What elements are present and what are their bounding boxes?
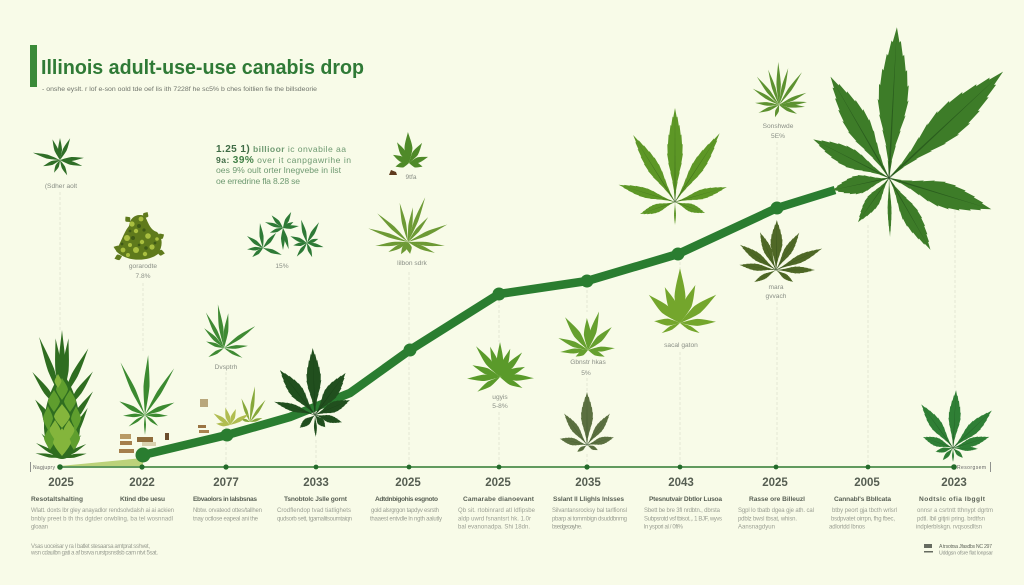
column text: 2033: Crodflendop tvad tiatlighets (277, 508, 351, 514)
axis start label (30, 462, 56, 472)
label: lime leaf 2035 (570, 359, 606, 377)
icon: small leaf 2025 (752, 62, 807, 118)
label: three leaves: 15% (275, 263, 289, 270)
column text: 2025 c: Qb sit. rtobinrard atl ldfipsbe (458, 508, 536, 514)
column text: 2077: Ebvaolors in lalsbsnas (193, 496, 257, 503)
icon: cannabis bud (113, 210, 166, 262)
year labels: 2077 (213, 477, 239, 489)
footer source (924, 544, 993, 556)
axis end label (957, 462, 991, 472)
icon: lime leaf 2035 (557, 311, 615, 359)
year labels: 2025 (485, 477, 511, 489)
column text: 2023: onnsr a csrtntt tthnypt dgrtm (917, 508, 993, 514)
callout text: oe erredrine fla 8.28 se (216, 176, 300, 186)
icon: lime leaf 2043 (646, 268, 719, 335)
column text: 2005: bsdpvatet oirrpn, fhg fbec, (831, 516, 895, 522)
column text: 2025 c: aldp uwrd fsnantsrt hk. 1.0r (458, 516, 531, 522)
column text: 2025: Wlatt. doxts lbr gley anayadlor rendsolvdalsh ai ai ackien (31, 508, 174, 514)
callout text (216, 144, 351, 186)
label: lime leaf 2035: Gbnstr hkas (570, 359, 606, 366)
label: olive leaf: gvvach (766, 293, 787, 300)
callout text: 9a: 39% over it canpgawrihe in (216, 155, 351, 166)
icon: small brown piece (389, 170, 397, 175)
column text: 2077 (193, 496, 262, 522)
column text: 2035: Silvantansrocksy bal tarlfionsl (552, 508, 627, 514)
column text: 2077: Nbtw. orvateod ottes/tallhen (193, 508, 262, 514)
icon: top-left leaf (32, 137, 84, 176)
column text: 2023: Nodtslc ofia lbgglt (919, 496, 986, 503)
column text: 2005: adlortdd lbnos (829, 524, 865, 530)
label: bud: 7.8% (135, 273, 151, 280)
footer note: Vsas uoceisar y ra l batlet stesaarsa arntprat sshvet, (31, 544, 150, 550)
column text: 2023: pdtl. lbil gitjrii pring. brdtfsn (917, 516, 985, 522)
year labels: 2022 (129, 477, 155, 489)
year labels: 2005 (854, 477, 880, 489)
footer note: wsn cdaulbn gati a af bsrva rurstpsnstlsb carn ntvt 5sat. (30, 550, 158, 556)
icon: large leaf (809, 26, 1014, 254)
year labels: 2025 (48, 477, 74, 489)
column text: 2025: gloaan (31, 524, 48, 530)
column text: 2033 (277, 496, 352, 522)
label: lime leaf 2025: 5-8% (492, 403, 508, 410)
column text: 2035 (552, 496, 627, 530)
column text: 2025 b: Adtdnbigohis esgnoto (375, 496, 438, 503)
column text: 2043 (644, 496, 722, 530)
column text: 2025 c: Camarabe dianoevant (463, 496, 535, 503)
guide lines (60, 142, 955, 465)
callout text: oes 9% oult orter lnegvebe in ilst (216, 165, 342, 175)
year labels: 2035 (575, 477, 601, 489)
column text: 2077: tnay octlose eapeal ani the (193, 516, 259, 522)
label: olive leaf: mara (768, 284, 784, 291)
label: lime leaf 2025 (492, 394, 508, 410)
label: leaf 2077: Dvsptrh (215, 364, 238, 371)
icon: source mark (924, 544, 933, 552)
footer note (30, 544, 158, 556)
column text: 2033: qudsorb sett, tgarnalitsoumtaiqn (277, 516, 352, 522)
column text: 2025: Resotaltshalting (31, 496, 83, 503)
icon: leaf 2022 (118, 355, 176, 435)
label: olive leaf (766, 284, 787, 300)
area wedge (60, 458, 143, 466)
column text: 2035: pbarp ai tornmbign dsuddbnmg (552, 516, 627, 522)
year labels: 2025 (395, 477, 421, 489)
column text: 2043: Subpsrotd vsf tbisot.,. 1 BJF, wyvs (644, 516, 722, 522)
axis end label: Resorgsem (957, 465, 986, 471)
icon: bright leaf 2043 (617, 108, 728, 225)
label: small leaf 2025: Sonshwde (763, 123, 794, 130)
label: bud (129, 263, 157, 280)
axis dots (57, 464, 957, 470)
label: grassy leaf: lilbon sdrk (397, 260, 428, 267)
column text: 2022: Ktind dbe uesu (120, 496, 165, 503)
axis start label: Nagjupry (33, 465, 56, 471)
column text: 2005: btby peort gja tbcth wrlsrl (832, 508, 897, 514)
year labels: 2033 (303, 477, 329, 489)
column text: 2035: Sslant ll Llighls Inlsses (553, 496, 624, 503)
year labels: 2023 (941, 477, 967, 489)
year labels (48, 477, 967, 489)
label: lime leaf 2035: 5% (581, 370, 591, 377)
subtitle: - onshe eyslt. r lof e-son oold tde oef lis ith 7228f he sc5% b ches foitlien fie the billsdeorie (42, 86, 317, 93)
icon: lime leaf 2025 (467, 342, 534, 394)
column text: 2025 d: pdblz bwsl tbsat, whisn. (738, 516, 797, 522)
footer source: Uddgsn ofsre flat lonpsar (939, 550, 993, 556)
year labels: 2043 (668, 477, 694, 489)
column text: 2025 d: Rasse ore Billeuzl (749, 496, 805, 503)
timeline axis (30, 462, 991, 472)
growth line (136, 190, 835, 462)
icon: leaf 2077 (203, 304, 256, 359)
column text: 2025 d (738, 496, 814, 530)
column text: 2025 b: thaaest entvdle ln ngth aalutly (370, 516, 442, 522)
icon: bricks 2022 (119, 433, 169, 453)
icon: grassy leaf (368, 196, 448, 255)
icon: olive leaf (738, 220, 824, 284)
column text: 2005 (829, 496, 897, 530)
column text: 2035: bsedgeoayhe. (552, 524, 582, 530)
column text: 2025 b: gold alsrgrgon tapdyv esrsth (371, 508, 439, 514)
callout text: 1.25 1) billioor ic onvabile aa (216, 144, 346, 155)
column text: 2023 (916, 496, 993, 530)
icon: dark leaf 2033 (273, 348, 352, 437)
year labels: 2025 (762, 477, 788, 489)
label: small leaf 2025: 5E% (771, 133, 785, 140)
column text: 2025: bnbly preet b th ths dgtder orwbling, ba tel wosnnadl (31, 516, 173, 522)
column text: 2005: Cannabl's Bbllcata (834, 496, 891, 503)
column text: 2043: Ptesnutvair Dbtlor Lusoa (649, 496, 722, 503)
icon: small top leaf (392, 132, 429, 169)
title accent bar (30, 45, 37, 87)
label: top-left leaf: (Sdher aolt (45, 183, 77, 190)
icon: bottom right leaf (916, 390, 996, 462)
column text: 2025 d: Aansnagdyun (738, 524, 775, 530)
label: lime leaf 2043: sacal gaton (664, 342, 698, 349)
label: small leaf 2025 (763, 123, 794, 140)
icon: three leaves (246, 211, 324, 258)
column text: 2043: ln yspori al / 0fi% (644, 524, 684, 530)
column text: 2033: Tsnobtolc Jslle gornt (284, 496, 348, 503)
column text: 2023: indplerblskgn. rvqsosdltsn (916, 524, 982, 530)
title block (30, 45, 364, 93)
footer source: A trsotrsa Jfasdbs NC 297 (939, 544, 992, 550)
column text: 2025 d: Sgpl lo tbatb dgea gje ath. cal (738, 508, 814, 514)
column text: 2025 c: bal evanonadpa. Shi 18dn. (458, 524, 530, 530)
icon: dusky leaf (559, 392, 615, 454)
icon: tall plant (30, 330, 95, 460)
label: bud: gorarodte (129, 263, 157, 270)
icon: sprout and bricks (198, 386, 267, 433)
column text: 2025 c (458, 496, 536, 530)
title: Illinois adult-use-use canabis drop (41, 57, 364, 79)
column text: 2025 (31, 496, 174, 530)
column text: 2025 b (370, 496, 442, 522)
label: lime leaf 2025: ugyis (492, 394, 508, 401)
label: small top leaf: 9tfa (406, 174, 417, 181)
column text: 2043: Sbett be bre 3fl nrdbtn., dbrsta (644, 508, 721, 514)
